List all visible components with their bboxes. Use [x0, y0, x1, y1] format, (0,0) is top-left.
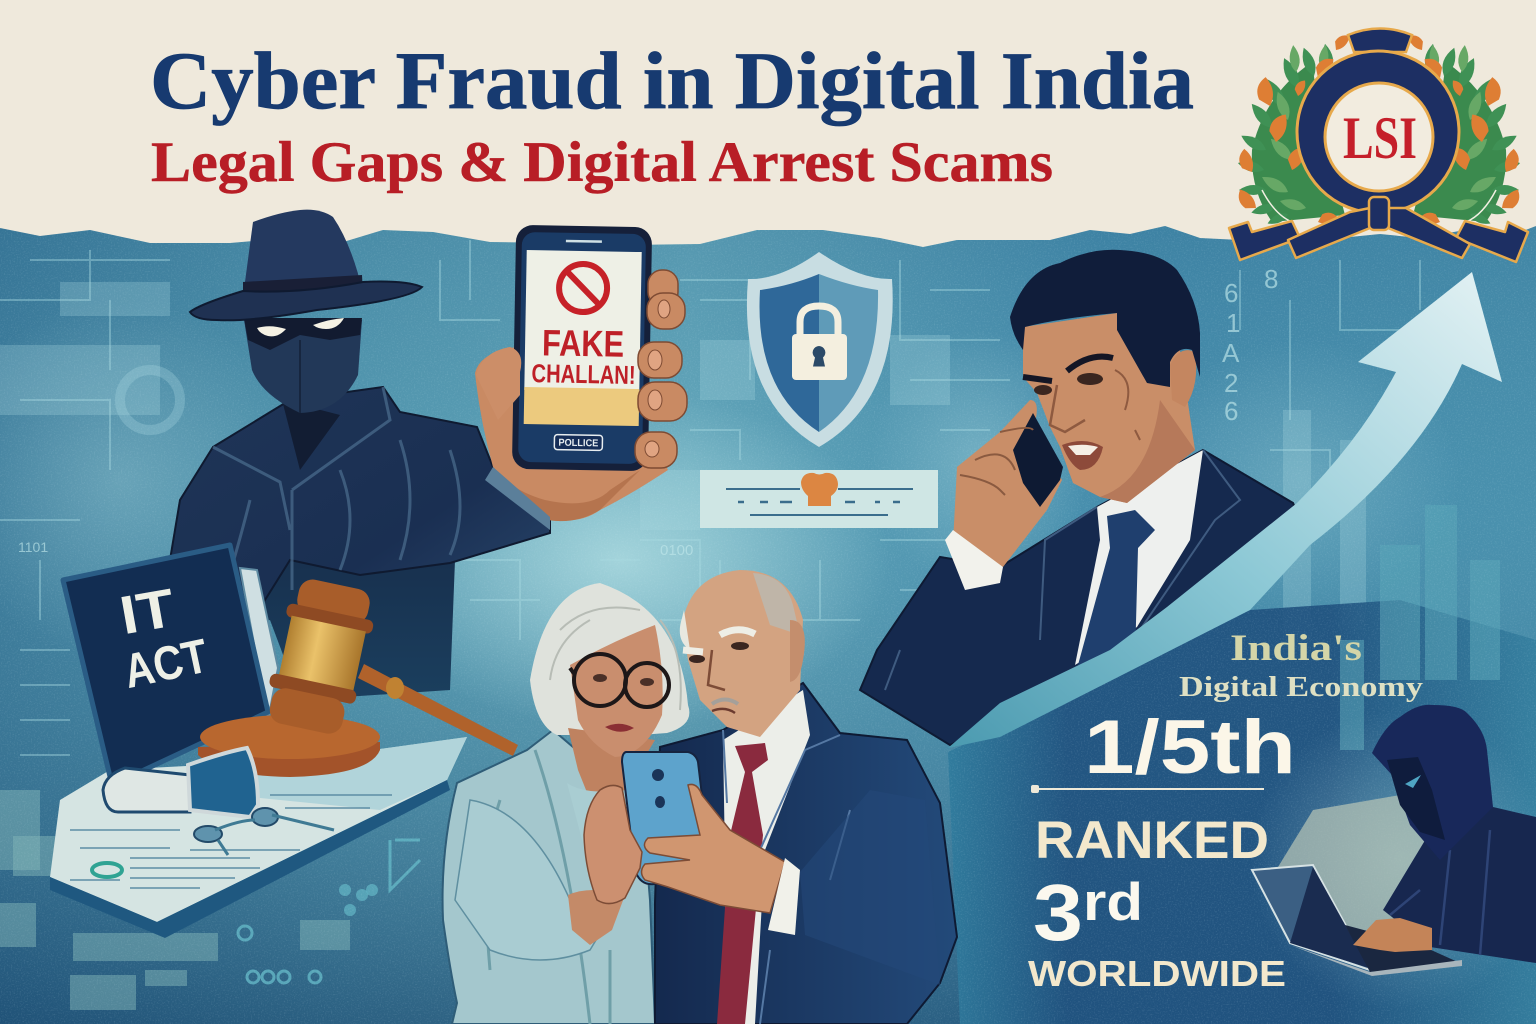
- phone warning text: FAKE: [542, 322, 624, 365]
- shirt cuff: [945, 530, 1003, 590]
- title: Cyber Fraud in Digital India: [150, 35, 1194, 126]
- crown cap: [1348, 28, 1412, 52]
- hood: [1372, 705, 1493, 860]
- wreath left: [1233, 31, 1351, 227]
- statistic: ranked 3rd worldwide: rd: [1083, 873, 1143, 932]
- hand palm: [475, 347, 668, 520]
- statistic: ranked 3rd worldwide: 3: [1033, 868, 1083, 957]
- hair: [1010, 250, 1200, 387]
- suit jacket: [655, 683, 957, 1024]
- man in suit on phone: [860, 250, 1300, 745]
- hair: [530, 583, 689, 735]
- face: [570, 625, 663, 757]
- torn paper header band: [0, 0, 1536, 247]
- brows and eyes: [683, 630, 755, 713]
- neck: [568, 728, 655, 800]
- background: digital circuit panel: 6: [1224, 396, 1238, 426]
- gavel head: [261, 575, 380, 738]
- gavel and sound block: [198, 575, 518, 777]
- hoodie body: [1383, 807, 1536, 963]
- book pages: [240, 568, 278, 720]
- statistic: India's Digital Economy: Digital Economy: [1179, 672, 1423, 703]
- lower-left data blocks: [0, 790, 350, 1010]
- thumb: [476, 347, 521, 420]
- hacker mask: [244, 320, 362, 413]
- shared blue smartphone and hands: [455, 752, 940, 985]
- background: digital circuit panel: 6: [1224, 278, 1238, 308]
- emblem: LSI crest with laurel wreath: [1229, 28, 1528, 262]
- ribbon: [1229, 197, 1528, 262]
- phone device: CHALLAN!: [531, 358, 636, 390]
- woman's forearm: [568, 890, 625, 945]
- lapels and seams: [723, 730, 850, 1024]
- sound block: [198, 742, 380, 777]
- lapels: [885, 450, 1240, 690]
- woman's sleeve: [455, 800, 596, 960]
- hacker jacket and sleeve: [170, 387, 550, 640]
- suit: [860, 450, 1300, 745]
- background: digital circuit panel: 2: [1224, 368, 1238, 398]
- glasses: [570, 654, 669, 707]
- IT Act law book: ACT: [119, 630, 213, 699]
- elderly man in suit: [655, 570, 957, 1024]
- statistic: ranked 3rd worldwide: [1028, 811, 1286, 994]
- phone badge: [554, 435, 603, 450]
- inner blouse: [567, 783, 620, 870]
- fingers: [635, 270, 687, 468]
- hooded hacker at laptop: [1252, 705, 1536, 976]
- ear: [1170, 350, 1196, 407]
- elderly woman: [443, 583, 689, 1024]
- shield with padlock: [747, 252, 893, 447]
- smartphone: [622, 752, 712, 884]
- red tie: [717, 743, 768, 1024]
- head: [682, 570, 803, 737]
- phone device: [512, 225, 652, 471]
- background: digital circuit panel: 0100: [660, 542, 693, 559]
- background: digital circuit panel: 1101: [18, 539, 48, 555]
- statistic: 1/5th: 1/5th: [1084, 705, 1296, 790]
- statistic: ranked 3rd worldwide: RANKED: [1035, 811, 1269, 870]
- statistic: India's Digital Economy: [1179, 628, 1423, 703]
- IT Act law book: [63, 545, 278, 812]
- gavel handle: [358, 664, 518, 756]
- head: [1023, 313, 1195, 503]
- statistic: ranked 3rd worldwide: WORLDWIDE: [1028, 953, 1286, 994]
- wreath right: [1407, 31, 1525, 227]
- fingers over phone: [960, 428, 1033, 495]
- hand: [953, 400, 1062, 567]
- hacker neck: [282, 400, 340, 470]
- navy ring: [1297, 51, 1459, 213]
- background: digital circuit panel: 8: [1264, 264, 1278, 294]
- subtitle: Legal Gaps & Digital Arrest Scams: [151, 131, 1053, 194]
- lower-right dark data panel: [948, 600, 1536, 1024]
- suit sleeve: [800, 790, 940, 985]
- background: digital circuit panel: 1: [1226, 308, 1240, 338]
- legal papers desk: [50, 737, 467, 938]
- hacker eyes: [257, 318, 344, 336]
- book title: IT: [116, 578, 179, 646]
- book spine curl: [103, 768, 190, 812]
- no-entry icon: [559, 264, 607, 312]
- phone at ear: [1013, 413, 1063, 507]
- hands on keyboard: [1353, 918, 1432, 952]
- book cover: [63, 545, 268, 785]
- hand holding phone: [475, 225, 687, 530]
- certificate bar with orange seal: [700, 470, 938, 528]
- hacker figure in fedora: [168, 210, 550, 700]
- woman's hand: [584, 785, 642, 904]
- shirt: [723, 690, 810, 1024]
- padlock: [792, 306, 847, 380]
- tie: [1078, 510, 1155, 665]
- shirt cuff: [768, 858, 800, 935]
- hacker torso: [168, 430, 455, 700]
- laptop: [1252, 865, 1370, 970]
- upward growth arrow: [948, 272, 1502, 748]
- face features: [1023, 357, 1140, 470]
- emblem lettering: LSI: [1343, 105, 1417, 171]
- divider: [1031, 785, 1264, 793]
- phone badge: POLLICE: [558, 438, 599, 449]
- sleeve cuff: [485, 467, 550, 530]
- man's hand: [642, 784, 785, 913]
- hacker hat: [190, 210, 422, 320]
- statistic: India's Digital Economy: India's: [1230, 628, 1362, 669]
- blue tablet and spectacles on desk: [188, 748, 334, 855]
- cardigan: [443, 730, 655, 1024]
- background: digital circuit panel: A: [1222, 338, 1240, 368]
- shirt: [1075, 450, 1203, 665]
